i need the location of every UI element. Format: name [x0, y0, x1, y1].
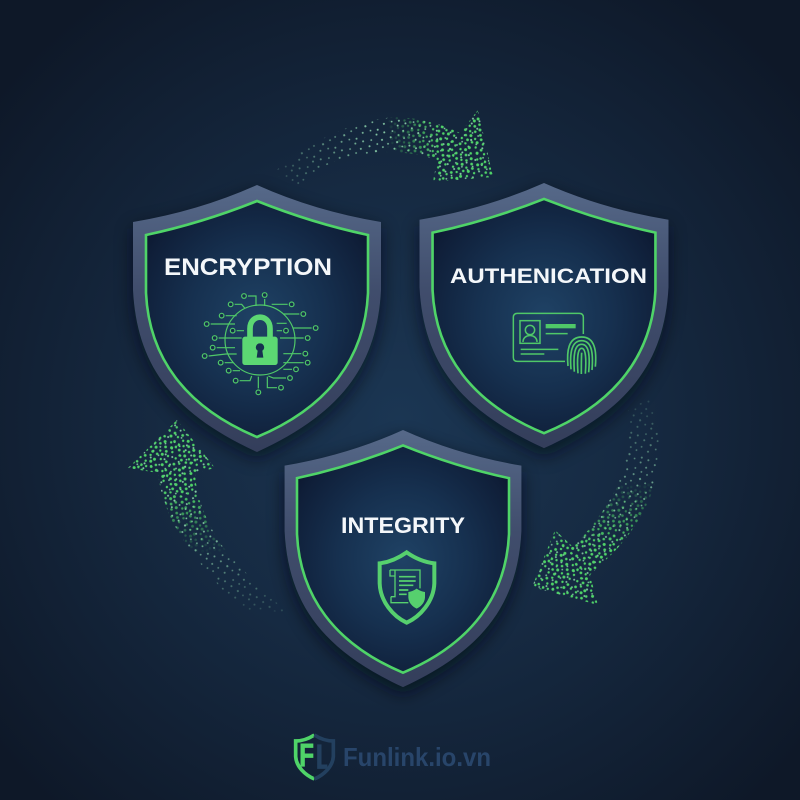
arrow: left particle arrow: [128, 420, 287, 612]
shield: encryption: [133, 185, 381, 459]
shield: authentication: [420, 183, 668, 457]
icon: document shield: [380, 552, 434, 623]
text: funlink.io.vn: Funlink.io.vn: [343, 742, 491, 772]
heading: authenication: AUTHENICATION: [450, 265, 647, 288]
heading: integrity: INTEGRITY: [341, 513, 465, 538]
icon: padlock with circuit: [202, 293, 318, 395]
icon: id card with fingerprint: [513, 313, 596, 374]
logo: funlink: [296, 735, 491, 779]
heading: encryption: ENCRYPTION: [164, 254, 332, 281]
shield: integrity: [285, 430, 521, 694]
icon: logo shield: [296, 735, 333, 779]
arrow: top particle arrow: [273, 110, 493, 187]
arrow: right particle arrow: [532, 398, 660, 605]
